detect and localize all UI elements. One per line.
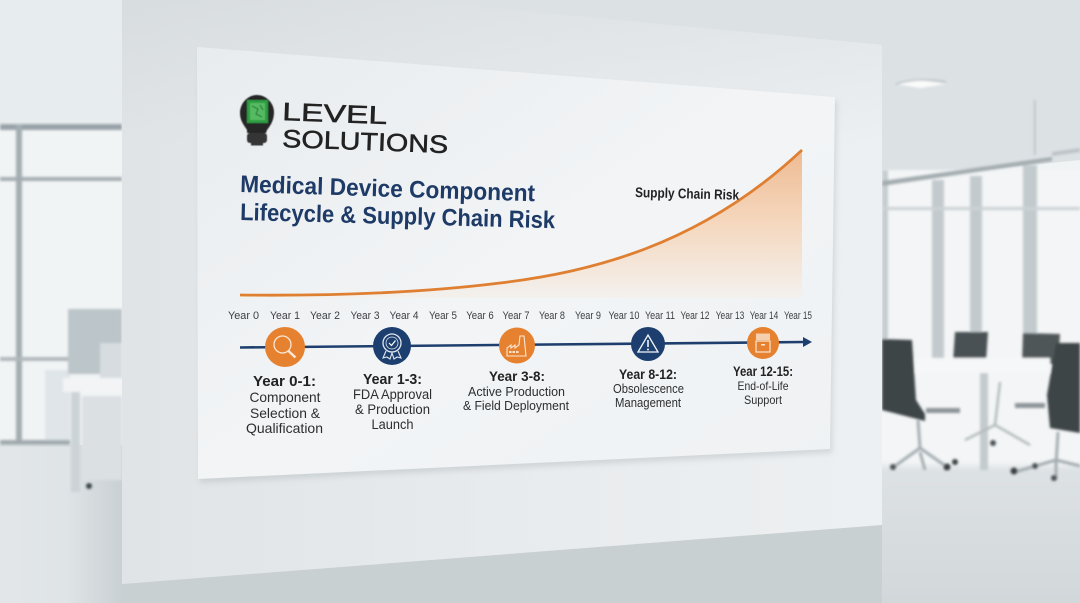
milestone: Year 3-8 <box>463 368 569 413</box>
milestone: Year 3-8: & Field Deployment <box>463 398 569 413</box>
year axis labels: Year 6 <box>466 310 494 322</box>
year axis labels: Year 8 <box>539 310 565 322</box>
year axis labels: Year 4 <box>390 310 418 322</box>
logo wordmark: LEVEL <box>282 98 388 130</box>
icon: warning <box>631 327 665 361</box>
chart label: Supply Chain Risk <box>635 184 739 203</box>
wall <box>122 0 882 584</box>
milestone: Year 1-3: Launch <box>372 417 414 432</box>
title <box>240 171 556 234</box>
chart: supply chain risk curve <box>240 150 802 298</box>
milestone: Year 8-12 <box>613 367 684 410</box>
milestone: Year 0-1 <box>246 373 323 436</box>
milestone: Year 1-3: Year 1-3: <box>363 372 422 388</box>
year axis labels: Year 2 <box>310 310 340 322</box>
year axis labels: Year 13 <box>716 310 744 322</box>
year axis labels: Year 1 <box>270 310 300 322</box>
milestone: Year 1-3: & Production <box>355 402 430 417</box>
milestone: Year 12-15: Support <box>744 393 783 407</box>
title: Lifecycle & Supply Chain Risk <box>240 199 556 234</box>
milestone: Year 8-12: Obsolescence <box>613 382 684 396</box>
logo: Level Solutions <box>240 95 449 159</box>
milestone: Year 12-15 <box>733 364 793 407</box>
icon: light bulb with chip <box>240 95 274 146</box>
milestone: Year 12-15: End-of-Life <box>738 379 789 393</box>
milestone: Year 3-8: Year 3-8: <box>489 368 545 384</box>
icon: archive box <box>747 327 779 359</box>
milestone: Year 0-1: Selection & <box>250 405 321 421</box>
right office: windows, table and chairs <box>860 80 1080 603</box>
milestone: Year 1-3 <box>353 372 432 432</box>
year axis labels: Year 9 <box>575 310 601 322</box>
icon: magnifier <box>265 327 305 367</box>
year axis labels: Year 15 <box>784 310 812 322</box>
milestone: Year 12-15: Year 12-15: <box>733 364 793 379</box>
year axis labels: Year 0 <box>228 310 259 322</box>
milestone: Year 3-8: Active Production <box>468 384 565 399</box>
panel: infographic board <box>197 47 837 483</box>
year axis labels: Year 3 <box>350 310 380 322</box>
logo wordmark <box>282 98 449 159</box>
year axis labels: Year 12 <box>680 310 710 322</box>
year axis labels: Year 10 <box>608 310 640 322</box>
milestone: Year 8-12: Management <box>615 396 681 410</box>
year axis labels: Year 11 <box>645 310 675 322</box>
milestone: Year 0-1: Qualification <box>246 420 323 436</box>
milestone: Year 0-1: Component <box>250 389 321 405</box>
icon: award ribbon <box>373 327 411 365</box>
milestone: Year 0-1: Year 0-1: <box>253 373 316 390</box>
year axis labels <box>228 310 812 322</box>
year axis labels: Year 14 <box>750 310 778 322</box>
year axis labels: Year 5 <box>429 310 457 322</box>
year axis labels: Year 7 <box>502 310 530 322</box>
milestone: Year 1-3: FDA Approval <box>353 387 432 402</box>
left window and desk <box>0 124 122 492</box>
floor in front of wall <box>122 522 882 603</box>
timeline arrow <box>240 337 812 348</box>
icon: factory <box>499 328 535 364</box>
logo wordmark: SOLUTIONS <box>282 125 449 159</box>
milestone: Year 8-12: Year 8-12: <box>619 367 677 382</box>
title: Medical Device Component <box>240 171 536 207</box>
